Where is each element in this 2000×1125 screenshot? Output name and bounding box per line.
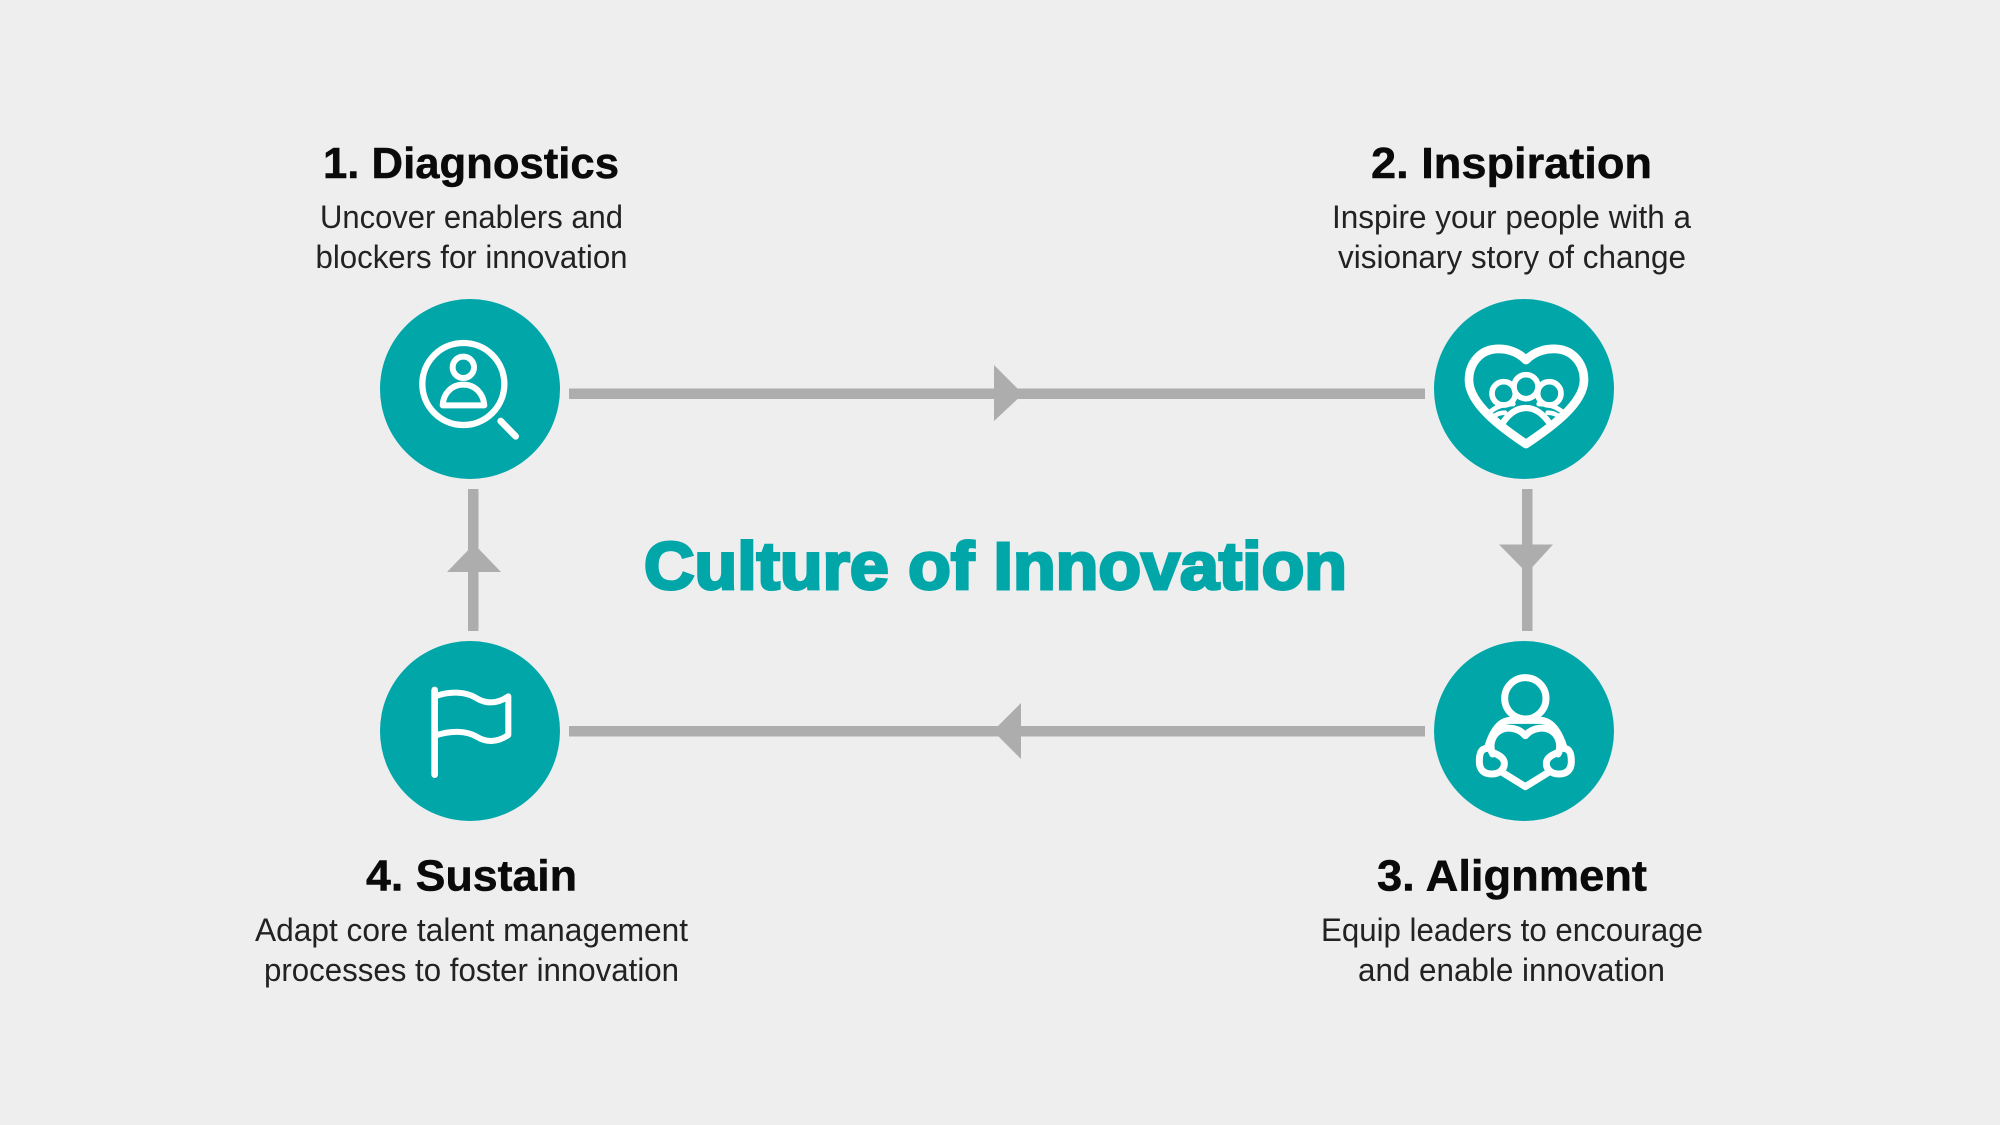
heading: sustain: 4. Sustain: [366, 852, 577, 900]
heading: inspiration: 2. Inspiration: [1371, 139, 1652, 188]
text block: sustain description: processes to foster innovation: [264, 952, 679, 988]
text block: diagnostics description: blockers for innovation: [316, 239, 628, 275]
icon: person holding heart: [1434, 641, 1614, 821]
icon: flag: [380, 641, 560, 821]
text block: inspiration description: [1332, 199, 1691, 275]
text block: inspiration description: Inspire your people with a: [1332, 199, 1691, 235]
heading: diagnostics: 1. Diagnostics: [323, 139, 619, 188]
text block: alignment description: and enable innovation: [1358, 952, 1665, 988]
icon: magnifier over person: [380, 299, 560, 479]
heading: alignment: 3. Alignment: [1377, 852, 1647, 900]
arrow: alignment to sustain: [569, 703, 1425, 759]
text block: sustain description: Adapt core talent management: [255, 912, 688, 948]
text block: diagnostics description: Uncover enablers and: [320, 199, 623, 235]
text block: alignment description: [1321, 912, 1703, 988]
arrow: sustain to diagnostics: [447, 489, 501, 631]
arrow: inspiration to alignment: [1499, 489, 1553, 631]
icon: heart with people: [1434, 299, 1614, 479]
arrow: diagnostics to inspiration: [569, 365, 1425, 421]
panel: step 2 inspiration: [1332, 139, 1691, 479]
text block: alignment description: Equip leaders to encourage: [1321, 912, 1703, 948]
panel: step 1 diagnostics: [316, 139, 628, 479]
text block: inspiration description: visionary story of change: [1338, 239, 1686, 275]
panel: step 3 alignment: [1321, 641, 1703, 988]
text block: diagnostics description: [316, 199, 628, 275]
title: Culture of Innovation: [644, 529, 1347, 604]
text block: sustain description: [255, 912, 688, 988]
panel: step 4 sustain: [255, 641, 688, 988]
